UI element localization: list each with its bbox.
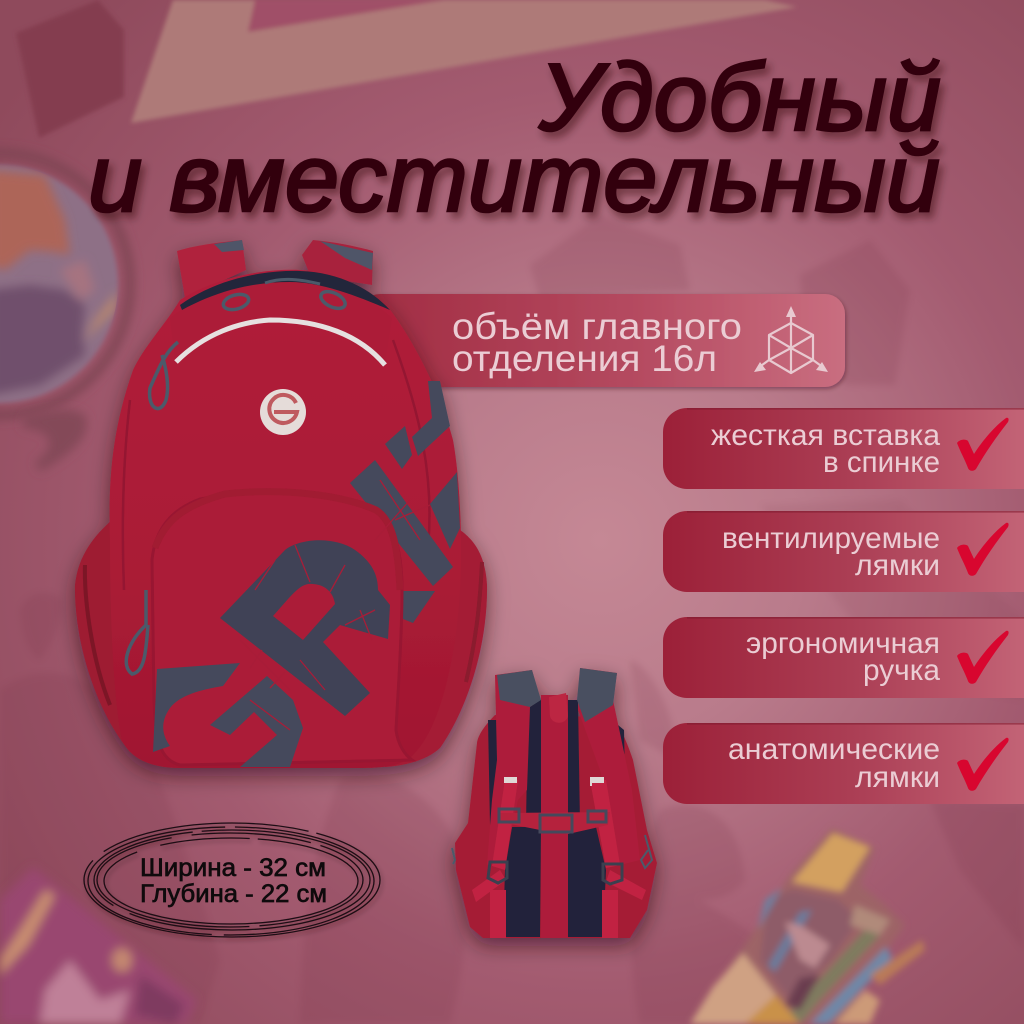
feature text (746, 627, 940, 687)
panel: rigid back insert (663, 408, 1024, 489)
left side pocket (75, 520, 175, 752)
icon: check mark (957, 631, 1009, 684)
dimensions text: Глубина - 22 см (140, 880, 327, 908)
feature text: жесткая вставка (711, 419, 940, 452)
print crack lines (240, 480, 430, 730)
feature text: лямки (855, 761, 940, 794)
feature text (722, 522, 940, 582)
logo badge (260, 389, 306, 435)
left top strap (177, 240, 246, 298)
panel: anatomical straps (663, 723, 1024, 804)
feature text: ручка (863, 654, 940, 687)
icon: check mark (957, 418, 1009, 471)
front backpack illustration (75, 240, 487, 768)
zipper pulls (126, 279, 348, 674)
front pocket (152, 493, 412, 765)
background: globe (0, 153, 130, 472)
haul handle (549, 693, 568, 723)
front pocket zip band (155, 492, 400, 590)
feature text: лямки (855, 549, 940, 582)
background: dark notebook top left (16, 0, 124, 138)
right shoulder strap (578, 668, 640, 865)
large logo print (220, 540, 390, 716)
title: и вместительный (88, 125, 940, 232)
title: Удобный (538, 44, 941, 151)
dimensions text: Ширина - 32 см (140, 854, 326, 882)
dark top mesh zip (180, 271, 390, 310)
lower logo print (153, 663, 303, 767)
panel: main compartment volume (360, 294, 845, 387)
panel: ventilated straps (663, 511, 1024, 592)
left shoulder strap (487, 670, 540, 865)
volume text: объём главного (452, 306, 742, 347)
volume text: отделения 16л (452, 338, 717, 379)
icon: check mark (957, 523, 1009, 576)
feature text: эргономичная (746, 627, 940, 660)
volume text (452, 306, 742, 379)
top flap (170, 280, 392, 365)
backpack main body (110, 270, 461, 768)
back body (455, 715, 657, 938)
background silhouettes of schoolchildren (0, 215, 1024, 1024)
icon: cube with arrows (754, 306, 828, 373)
feature text: анатомические (728, 733, 940, 766)
reflective tabs (504, 777, 604, 786)
lower webbing straps (472, 780, 646, 938)
feature text (711, 419, 940, 479)
centre back panel (541, 695, 568, 938)
icon: check mark (957, 738, 1009, 791)
feature text (728, 733, 940, 794)
right-side print stripes (343, 381, 460, 623)
background: pencils bottom right (690, 828, 925, 1024)
back view backpack illustration (452, 668, 657, 938)
side seam lines (123, 340, 430, 590)
scribbled oval (84, 823, 380, 937)
dimensions text (140, 854, 327, 908)
background: ruler triangle (131, 0, 797, 123)
title (88, 44, 941, 232)
panel: ergonomic handle (663, 617, 1024, 698)
white reflective piping (176, 320, 385, 365)
background: book bottom left (0, 867, 197, 1024)
side zip pulls (452, 835, 652, 868)
right side pocket (385, 525, 487, 767)
dark back mesh (488, 700, 626, 937)
dimensions badge (84, 823, 380, 937)
right top strap (302, 240, 373, 285)
chest strap and buckle (488, 809, 622, 884)
feature text: вентилируемые (722, 522, 940, 555)
feature text: в спинке (823, 446, 940, 479)
